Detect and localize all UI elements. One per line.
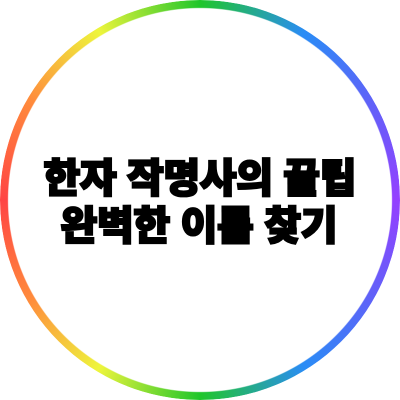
title line 2: 완벽한 이름 찾기 [60, 204, 338, 248]
title line 1: 한자 작명사의 꿀팁 [44, 157, 356, 201]
